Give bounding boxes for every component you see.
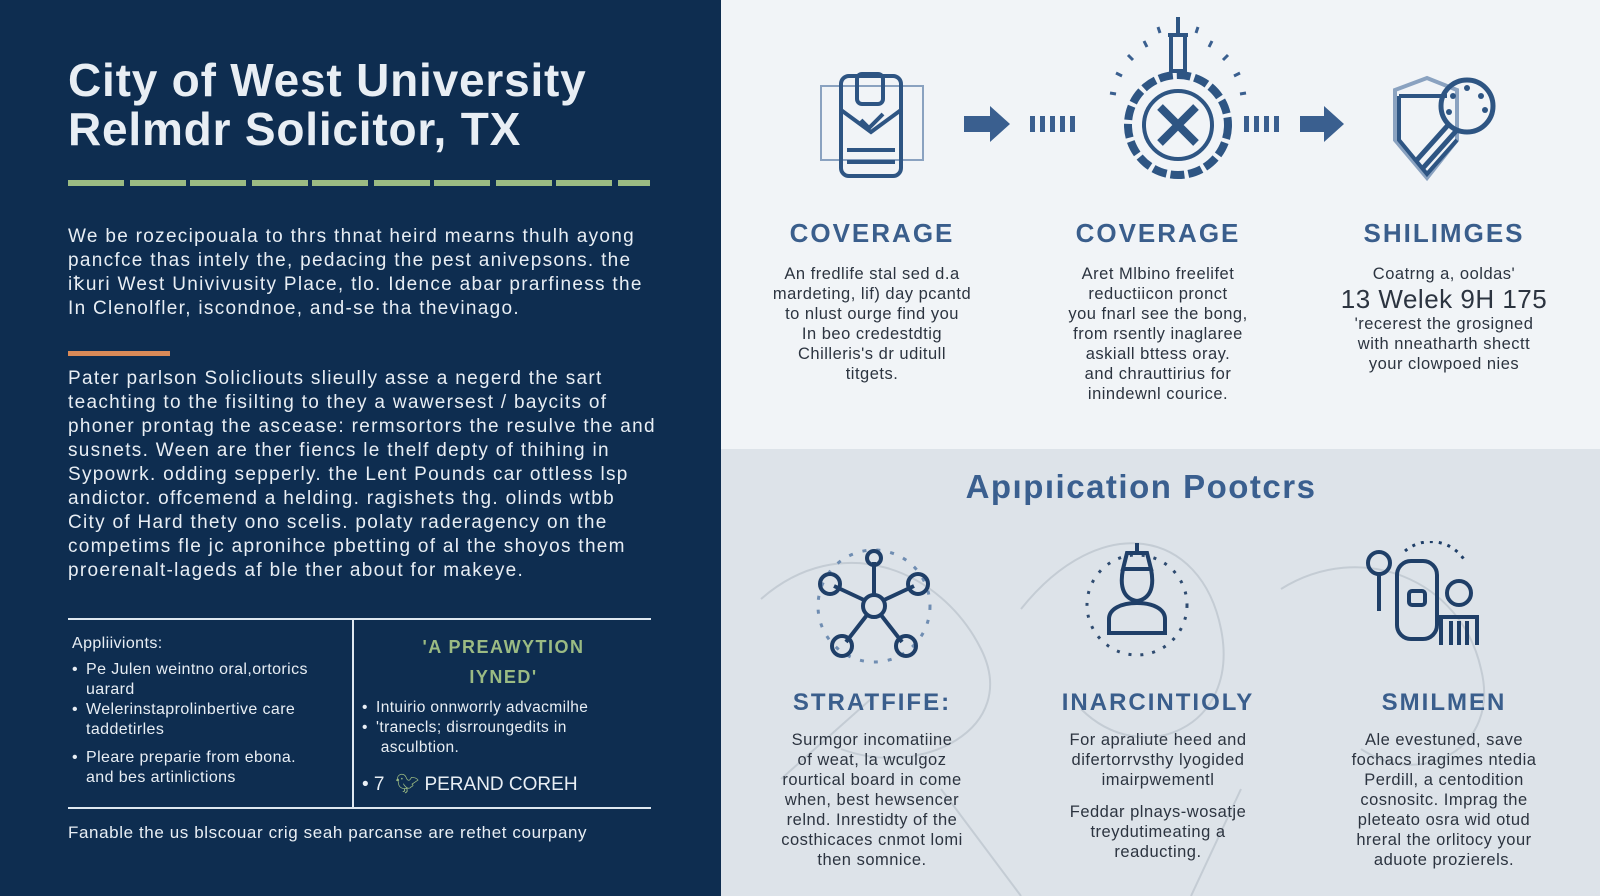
column: applications list: Pe Julen weintno oral,ortorics uarard <box>86 661 308 698</box>
column 2 text: inindewnl courice. <box>1088 385 1228 403</box>
column 3 text: with nneatharth shectt <box>1358 335 1530 353</box>
column: applications list: Appliivionts: <box>72 635 163 652</box>
body paragraph: andictor. offcemend a helding. ragishets thg. olinds wtbb <box>68 488 615 509</box>
column 3 text: Coatrng a, ooldas' <box>1373 265 1515 283</box>
arrow 1 <box>964 106 1075 142</box>
preparation heading <box>422 637 585 687</box>
column: applications list <box>72 635 308 786</box>
column 3 text <box>1341 265 1547 373</box>
body paragraph: City of Hard thety ono scelis. polaty raderagency on the <box>68 512 608 533</box>
column 2 text: reductiicon pronct <box>1088 285 1228 303</box>
column 2 text: readucting. <box>1114 843 1202 861</box>
body paragraph: Pater parlson Solicliouts slieully asse a negerd the sart <box>68 368 603 389</box>
panel: application factors <box>721 449 1600 896</box>
column: preparation: asculbtion. <box>381 739 459 756</box>
column: applications list: Welerinstaprolinbertive care taddetirles <box>86 701 295 738</box>
column 1 text: mardeting, lif) day pcantd <box>773 285 971 303</box>
column 1 text <box>773 265 971 383</box>
column 1 text: rourtical board in come <box>782 771 962 789</box>
column: preparation: 'tranecls; disrroungedits in <box>376 719 567 736</box>
intro paragraph: We be rozecipouala to thrs thnat heird mearns thulh ayong <box>68 226 635 247</box>
icon: person badge <box>1086 543 1188 656</box>
column 1 text: costhicaces cnmot lomi <box>781 831 963 849</box>
panel: left dark <box>0 0 721 896</box>
column 1 text: relnd. Inrestidty of the <box>787 811 957 829</box>
column: applications list: Pleare preparie from ebona. <box>86 749 296 766</box>
green dashed divider <box>68 180 650 186</box>
intro paragraph: iꝁuri West Univivusity Place, tlo. Idence abar prarfiness the <box>68 274 643 295</box>
column 2 text: askiall bttess oray. <box>1086 345 1230 363</box>
intro paragraph: pancfce thas intely the, pedacing the pest anivepsons. the <box>68 250 631 271</box>
column 3 text: 'recerest the grosigned <box>1355 315 1533 333</box>
icon: network <box>816 548 932 664</box>
title: Relmdr Solicitor, TX <box>68 103 521 155</box>
column 1 text: of weat, la wculgoz <box>798 751 946 769</box>
orange accent line <box>68 351 170 356</box>
icon: people <box>1366 541 1479 645</box>
column 1 text: when, best hewsencer <box>785 791 959 809</box>
column 2 text: difertorrvsthy lyogided <box>1072 751 1244 769</box>
icon: gear <box>1110 17 1246 179</box>
preparation heading: 'A PREAWYTION <box>422 637 585 657</box>
column 1 heading: COVERAGE <box>790 218 954 248</box>
twitter line: • 7 🐦︎ PERAND COREH <box>362 774 578 795</box>
column 2 text <box>1068 265 1248 403</box>
body paragraph: phoner prontag the ascease: rermsortors the resulve the and <box>68 416 656 437</box>
title: City of West University <box>68 54 587 106</box>
column 3 heading: SHILIMGES <box>1363 218 1524 248</box>
title <box>68 54 587 155</box>
column 3 text: Ale evestuned, save <box>1365 731 1523 749</box>
column 1 heading: STRATFIFE: <box>793 689 951 716</box>
body paragraph: teachting to the fisilting to they a wawersest / baycits of <box>68 392 607 413</box>
column 2 text: Aret Mlbino freelifet <box>1082 265 1234 283</box>
column 3 text: your clowpoed nies <box>1369 355 1519 373</box>
column 1 text: titgets. <box>846 365 898 383</box>
column: preparation: Intuirio onnworrly advacmilhe <box>376 699 588 716</box>
column 3 text: cosnositc. Imprag the <box>1360 791 1528 809</box>
body paragraph: susnets. Ween are ther fiencs le thelf depty of thihing in <box>68 440 610 461</box>
column 2 heading: INARCINTIOLY <box>1062 689 1254 716</box>
intro paragraph <box>68 226 643 319</box>
body paragraph: competims fle jc apronihce pbetting of al the shoyos them <box>68 536 626 557</box>
column 3 text: Perdill, a centodition <box>1364 771 1524 789</box>
column 2 text <box>1069 731 1247 861</box>
footer text: Fanable the us blscouar crig seah parcanse are rethet courpany <box>68 823 587 842</box>
column 3 text: hreral the orlitocy your <box>1356 831 1532 849</box>
column 1 text: In beo credestdtig <box>802 325 942 343</box>
column 1 text: to nlust ourge find you <box>785 305 959 323</box>
column 3 text: fochacs iragimes ntedia <box>1352 751 1536 769</box>
column: preparation <box>362 637 588 795</box>
column 2 text: and chrauttirius for <box>1085 365 1231 383</box>
icon: document <box>820 72 924 178</box>
table: applications box <box>68 618 651 809</box>
panel: top process <box>721 0 1600 449</box>
intro paragraph: In Clenolfler, iscondnoe, and-se tha thevinago. <box>68 298 520 319</box>
column 3 text <box>1352 731 1536 869</box>
body paragraph <box>68 368 656 581</box>
preparation heading: IYNED' <box>469 667 538 687</box>
column 2 text: you fnarl see the bong, <box>1068 305 1248 323</box>
column 2 text: from rsently inaglaree <box>1073 325 1243 343</box>
column 1 text: An fredlife stal sed d.a <box>784 265 960 283</box>
body paragraph: proerenalt-lageds af ble ther about for makeye. <box>68 560 524 581</box>
column 3 heading: SMILMEN <box>1382 689 1506 716</box>
column 1 text: Surmgor incomatiine <box>792 731 952 749</box>
column 3 text: pleteato osra wid otud <box>1358 811 1530 829</box>
divider vertical <box>352 620 354 807</box>
background sketch decoration <box>760 542 1485 896</box>
column 2 text: treydutimeating a <box>1090 823 1226 841</box>
icon: shield magnifier <box>1393 76 1496 181</box>
column 2 text: For apraliute heed and <box>1069 731 1247 749</box>
column 3 text: 13 Welek 9H 175 <box>1341 284 1547 314</box>
body paragraph: Sypowrk. odding sepperly. the Lent Pounds car ottless lsp <box>68 464 629 485</box>
column 1 text: then somnice. <box>817 851 927 869</box>
column 1 text <box>781 731 963 869</box>
section title: Apıpıication Pootcrs <box>966 468 1316 505</box>
column 2 heading: COVERAGE <box>1076 218 1240 248</box>
column: applications list: and bes artinlictions <box>86 769 236 786</box>
arrow 2 <box>1244 106 1344 142</box>
column 2 text: imairpwementl Feddar plnays-wosatje <box>1070 771 1246 821</box>
column 1 text: Chilleris's dr uditull <box>798 345 946 363</box>
column 3 text: aduote prozierels. <box>1374 851 1514 869</box>
